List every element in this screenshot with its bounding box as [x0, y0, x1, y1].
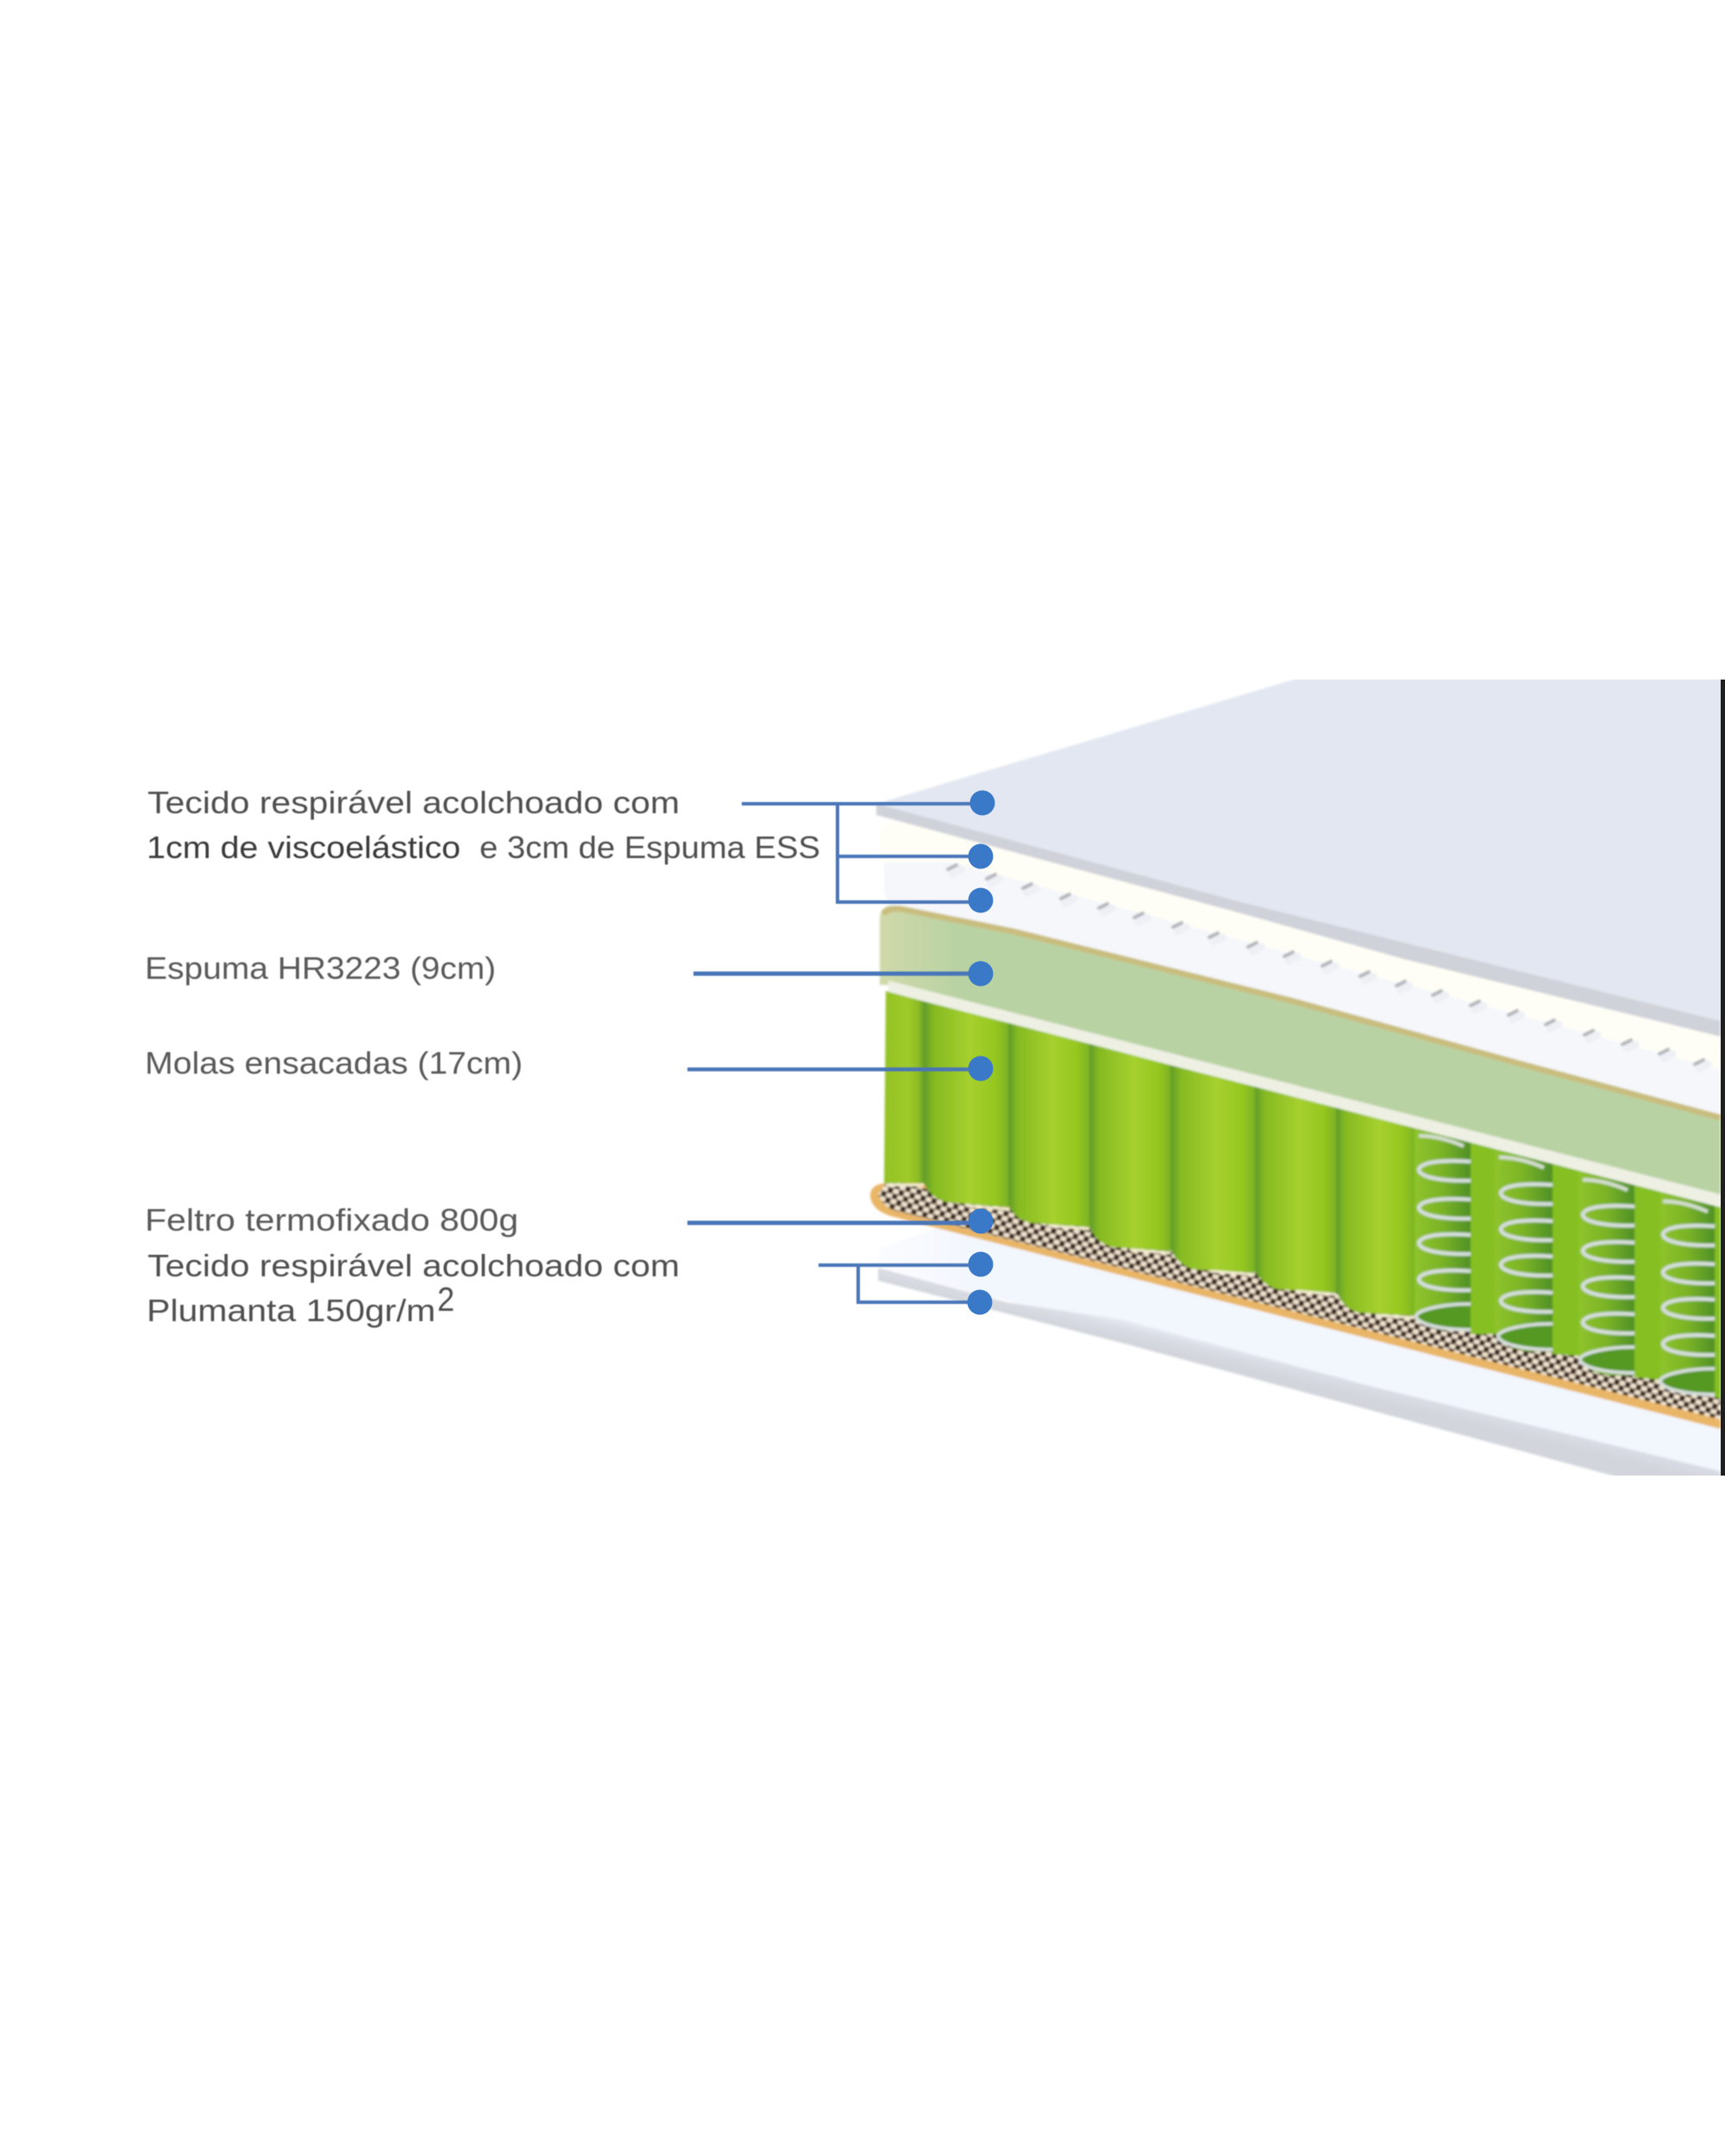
layer: white ESS foam: [884, 862, 1721, 1117]
cream highlights along pocket bases: [886, 1185, 1414, 1318]
dot: bottom padding: [968, 1290, 992, 1314]
dot: cream layer: [968, 843, 994, 869]
marker dots: [968, 790, 995, 1314]
top fabric side edge: [876, 804, 1721, 1037]
label: HR foam: Espuma HR3223 (9cm): [145, 950, 496, 986]
layer: top fabric surface: [876, 664, 1725, 1024]
label: bottom fabric line 1: Tecido respirável acolchoado com: [147, 1248, 680, 1283]
label: bottom fabric line 2: Plumanta 150gr/m: [147, 1293, 436, 1328]
label: bottom fabric line 2: [147, 1282, 455, 1328]
label: top fabric line 2: 1cm de viscoelástico: [147, 830, 461, 865]
pocket springs: open pockets with coils: [1414, 1128, 1721, 1399]
infographic canvas: [147, 680, 1725, 1476]
layer: orange felt base: [870, 1183, 1721, 1429]
leader: felt: [687, 1221, 981, 1225]
dot: springs: [968, 1056, 994, 1081]
dot: bottom fabric: [968, 1252, 994, 1276]
black right edge bar: [1721, 680, 1725, 1476]
leader: springs: [687, 1068, 981, 1071]
label: springs: Molas ensacadas (17cm): [145, 1045, 523, 1081]
mattress cross-section illustration: [870, 664, 1725, 1505]
felt texture: [878, 1180, 1721, 1420]
dot: felt: [968, 1209, 994, 1233]
leader lines: [687, 804, 982, 1302]
dot: top fabric: [969, 790, 995, 816]
layer: top cream comfort layer: [880, 818, 1721, 1069]
leader group: bottom fabric layers: [819, 1265, 981, 1302]
leader group: top fabric layers: [742, 804, 982, 902]
dot: ESS foam: [968, 888, 994, 912]
foam tan top edge: [883, 909, 1721, 1118]
label: top fabric line 1: Tecido respirável acolchoado com: [147, 785, 680, 820]
separator stripe between foam and springs: [888, 981, 1721, 1207]
label: bottom fabric line 2: 2: [437, 1282, 455, 1319]
dot: HR foam: [968, 961, 994, 987]
label: top fabric line 2: [147, 830, 820, 865]
pocket springs: closed pockets: [884, 991, 1414, 1316]
label: felt: Feltro termofixado 800g: [145, 1202, 518, 1238]
perforation dashes: [948, 865, 1708, 1069]
layer: bottom quilted fabric: [878, 1227, 1721, 1505]
labels: [145, 785, 820, 1328]
leader: foam: [693, 971, 981, 976]
label: top fabric line 2: e 3cm de Espuma ESS: [480, 830, 820, 865]
layer: HR foam: [880, 906, 1721, 1200]
